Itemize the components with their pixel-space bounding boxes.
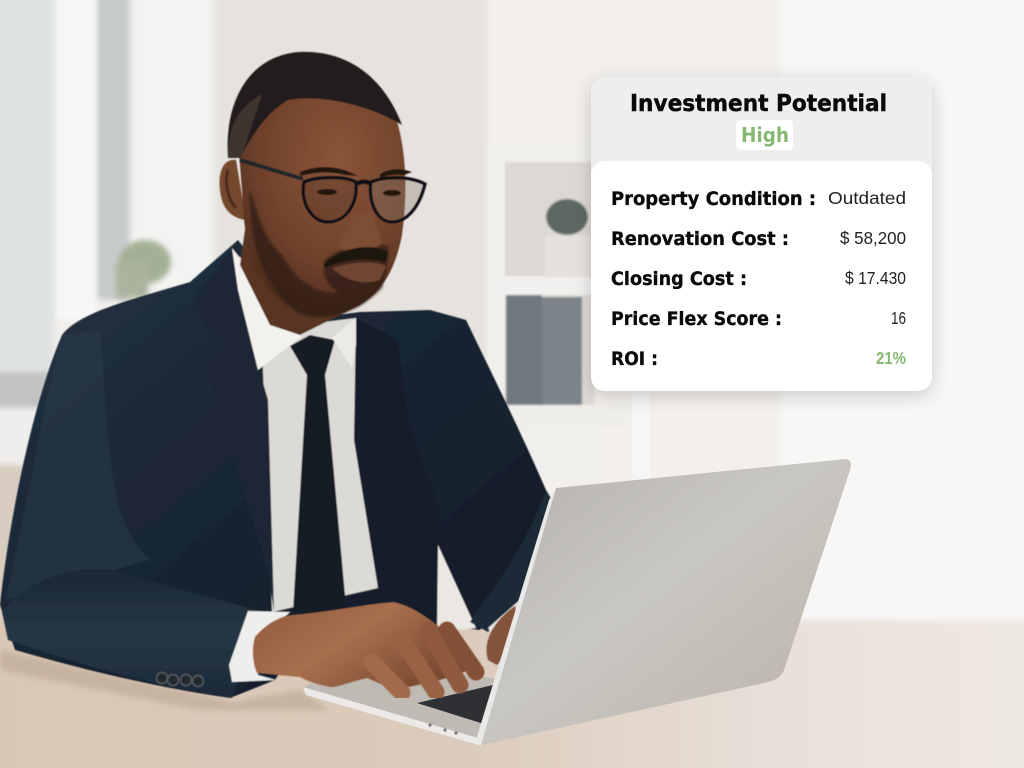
heading: Investment Potential — [630, 91, 887, 117]
row: renovation cost — [611, 228, 906, 250]
row: renovation cost: $ 58,200 — [840, 228, 906, 248]
left lapel — [190, 240, 274, 612]
person — [0, 52, 552, 710]
background: window plant — [116, 240, 171, 298]
forearm sleeve — [2, 569, 262, 698]
lips — [332, 262, 386, 282]
buttons — [156, 672, 204, 686]
row: price flex score: Price Flex Score : — [611, 308, 782, 330]
base — [303, 660, 505, 746]
glasses — [240, 160, 425, 222]
row: property condition: Property Condition : — [611, 188, 816, 210]
row: renovation cost: Renovation Cost : — [611, 228, 789, 250]
eyebrows — [300, 167, 358, 176]
front edge — [303, 687, 482, 746]
background: shelf — [489, 143, 650, 483]
jacket — [0, 240, 546, 698]
row: closing cost: $ 17.430 — [845, 268, 906, 288]
row: price flex score — [611, 308, 906, 330]
row: roi — [611, 348, 906, 370]
row: property condition: Outdated — [828, 188, 906, 208]
face — [238, 91, 405, 315]
beard — [250, 190, 389, 317]
right sleeve — [470, 490, 552, 632]
row: closing cost — [611, 268, 906, 290]
moustache — [324, 247, 388, 268]
right lapel — [354, 318, 440, 618]
row: roi: 21% — [876, 348, 906, 368]
upper arm highlight — [5, 330, 150, 600]
ear — [220, 160, 246, 220]
shirt — [232, 248, 378, 612]
hair — [228, 52, 402, 158]
neck — [240, 200, 390, 335]
nose — [340, 212, 382, 251]
keyboard — [417, 685, 493, 724]
gap between arm and torso — [437, 545, 476, 632]
hands — [253, 602, 516, 693]
card body — [591, 161, 932, 391]
laptop lid — [476, 459, 851, 745]
row: roi: ROI : — [611, 348, 658, 370]
eyes — [317, 189, 337, 195]
card: investment potential — [591, 77, 932, 391]
arm shadow on table — [0, 650, 330, 710]
table — [0, 620, 1024, 768]
laptop — [303, 660, 505, 746]
row: price flex score: 16 — [891, 308, 906, 328]
collars — [232, 248, 302, 370]
tie — [290, 335, 346, 620]
cuff — [229, 611, 290, 682]
badge: high: High — [741, 123, 789, 147]
row: closing cost: Closing Cost : — [611, 268, 747, 290]
